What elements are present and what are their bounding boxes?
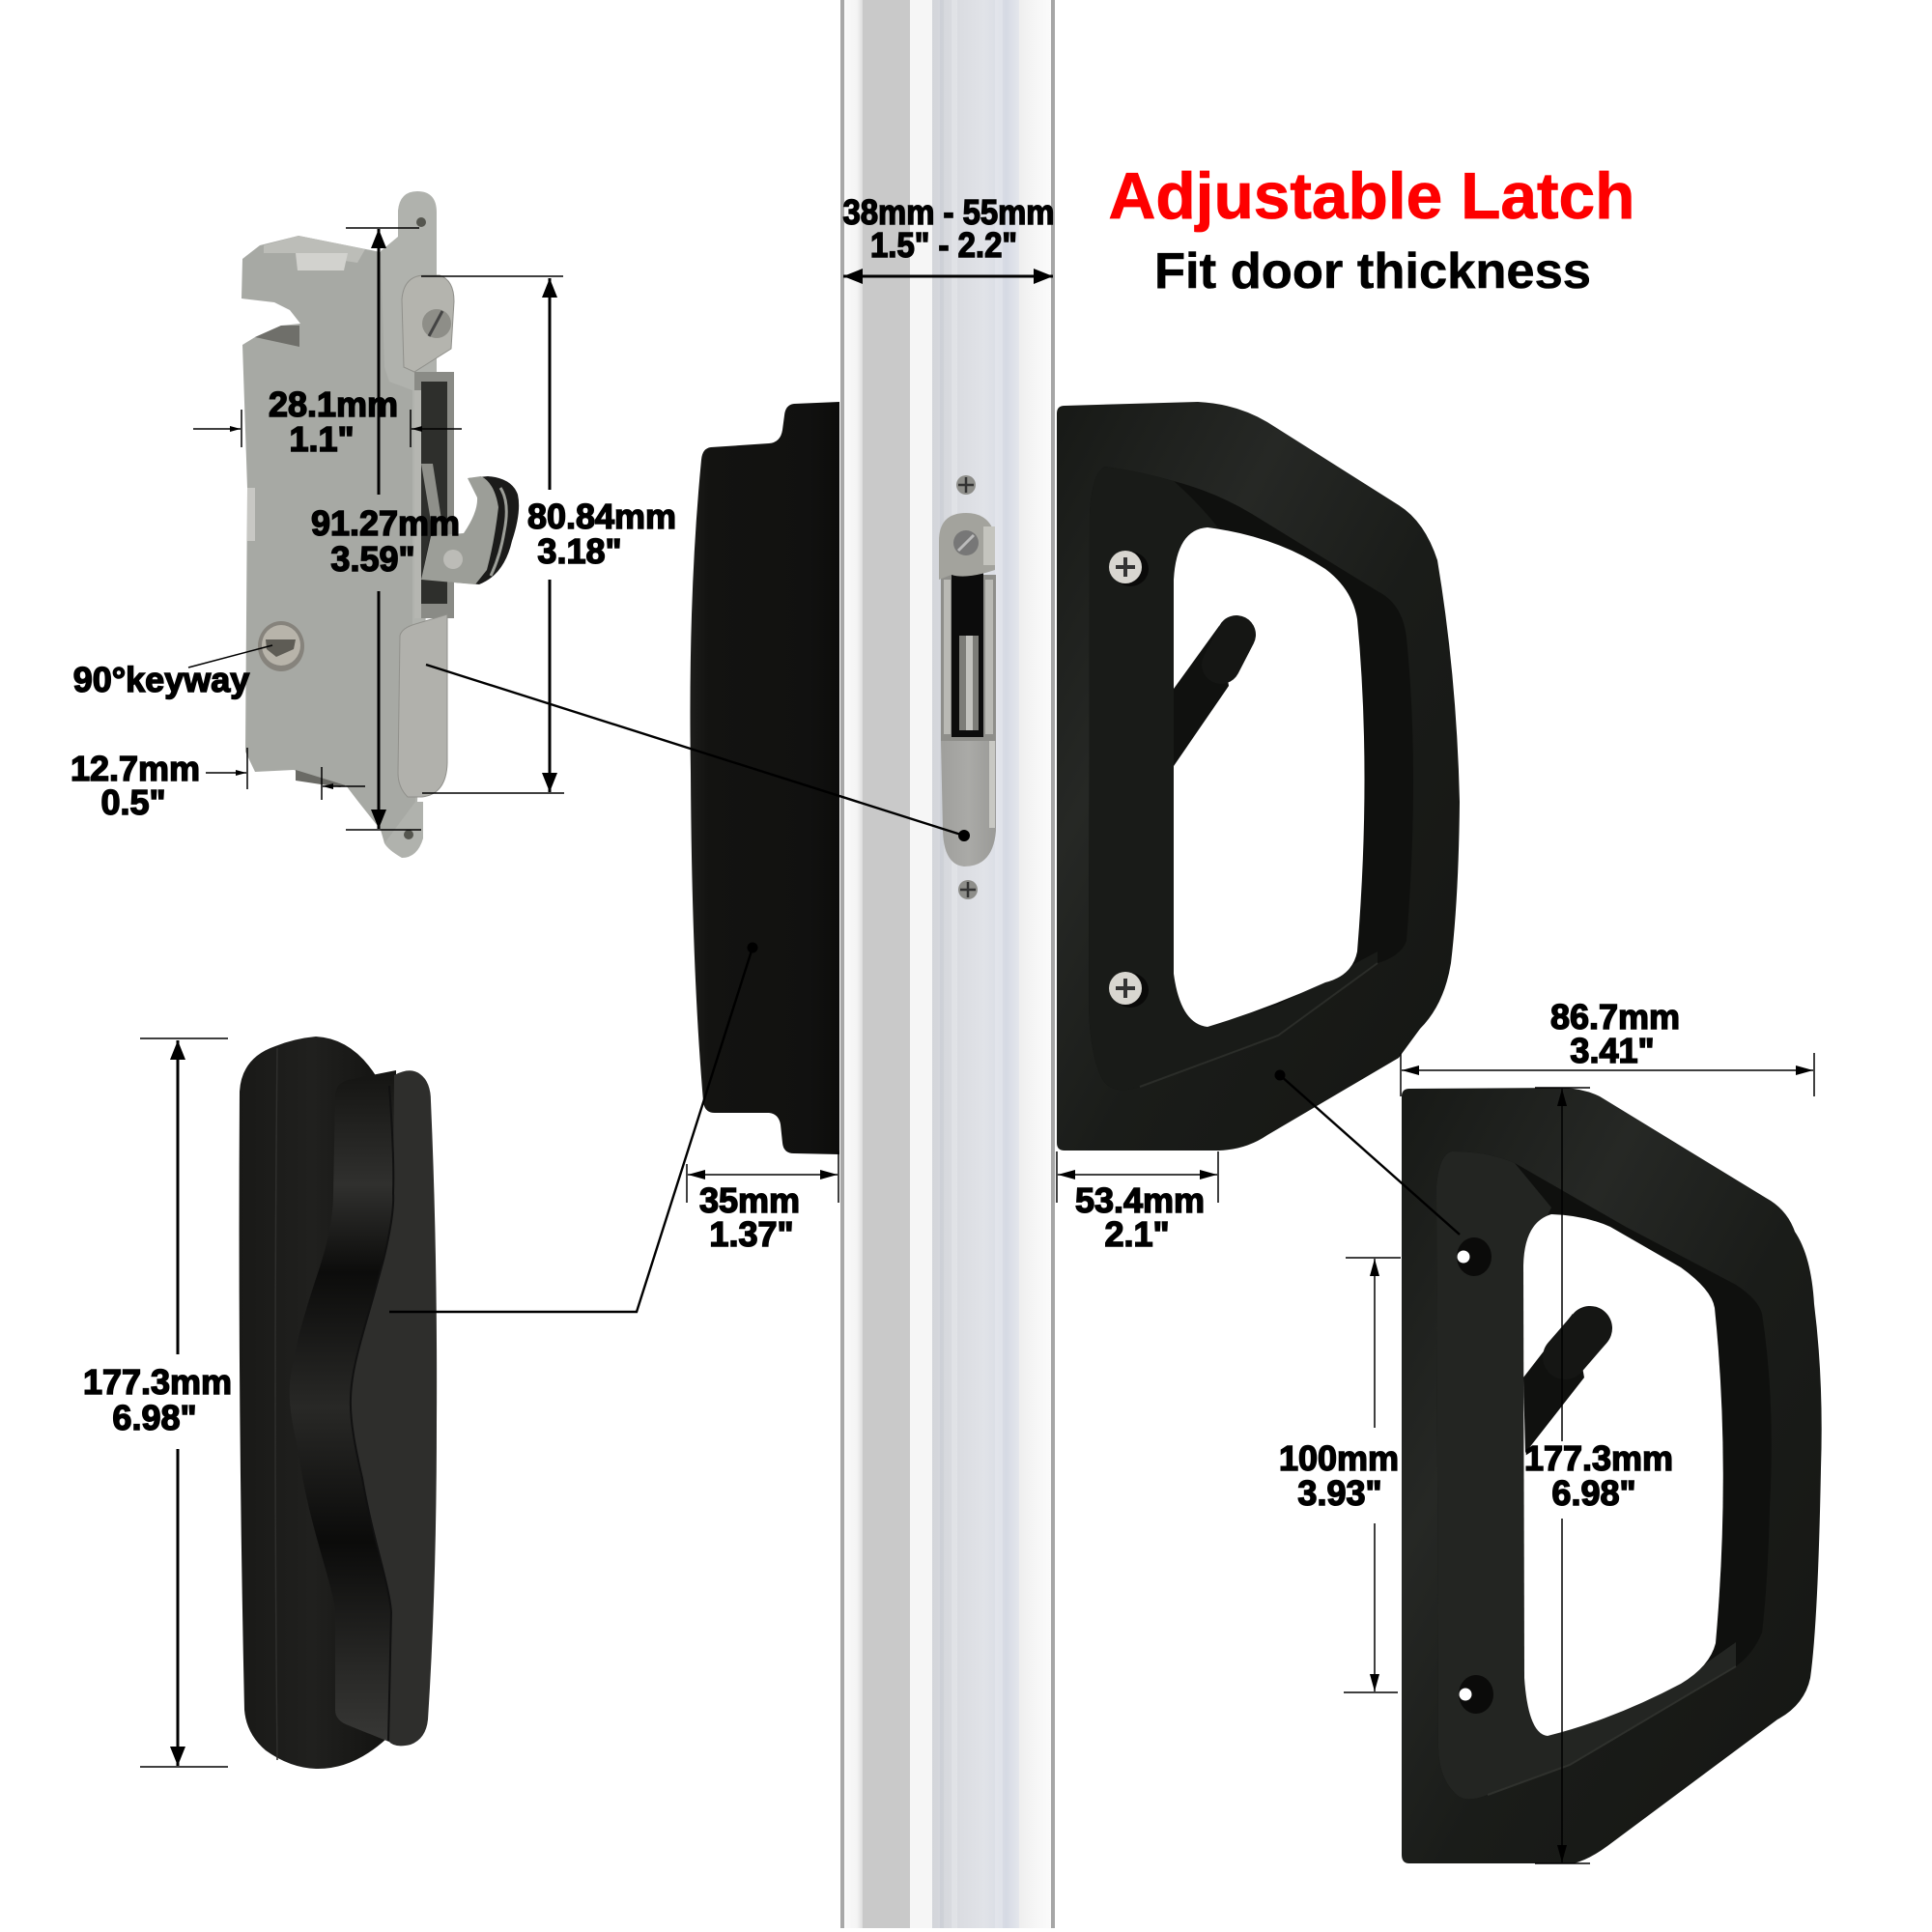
- body: [242, 236, 415, 843]
- dimension: screw spacing 100mm: 100mm: [1279, 1438, 1399, 1478]
- dimension: lock depth 28.1mm: 28.1mm: [269, 384, 398, 424]
- dimension: lock height 91.27mm: 91.27mm: [311, 503, 460, 543]
- dimension: outside handle width 86.7mm: 3.41": [1570, 1031, 1655, 1070]
- panel: door edge: [840, 0, 1055, 1928]
- dimension: inside handle height 177.3mm: [83, 1038, 232, 1767]
- dimension: door thickness: 1.5" - 2.2": [870, 225, 1017, 265]
- top plate: [402, 275, 454, 372]
- mounting strip: [381, 191, 437, 858]
- icon: mortise lock body: [242, 191, 519, 858]
- dimension: inside handle height 177.3mm: 6.98": [112, 1398, 197, 1437]
- dimension: keyway label: 90°keyway: [73, 660, 249, 699]
- dimension: door thickness: [842, 192, 1055, 276]
- dimension: inside handle depth 35mm: [687, 1151, 838, 1254]
- dimension: lock height 91.27mm: 3.59": [330, 539, 415, 579]
- dimension: screw spacing 100mm: 3.93": [1297, 1473, 1382, 1513]
- dimension: backset 12.7mm: 0.5": [100, 782, 166, 822]
- icon: inside pull back box: [690, 402, 839, 1154]
- lever: [1174, 626, 1236, 766]
- icon: inside handle front view: [240, 1037, 437, 1769]
- dimension: backset 12.7mm: [71, 748, 365, 822]
- bottom plate: [398, 614, 447, 797]
- dimension: outside handle depth 53.4mm: 53.4mm: [1075, 1180, 1205, 1220]
- dimension: lock depth 28.1mm: [193, 384, 462, 459]
- lever: [1523, 1314, 1590, 1453]
- dimension: latch plate 80.84mm: [421, 276, 676, 793]
- dimension: outside handle height 177.3mm: 6.98": [1551, 1473, 1636, 1513]
- icon: inside handle back view: [1402, 1088, 1822, 1863]
- title: Adjustable Latch: [1109, 159, 1634, 233]
- icon: outside handle side view: [1057, 402, 1460, 1151]
- dimension: inside handle depth 35mm: 1.37": [709, 1214, 794, 1254]
- dimension: outside handle height 177.3mm: 177.3mm: [1524, 1438, 1673, 1478]
- dimension: outside handle depth 53.4mm: 2.1": [1104, 1214, 1170, 1254]
- dimension: latch plate 80.84mm: 80.84mm: [527, 497, 676, 536]
- subtitle: Fit door thickness: [1154, 243, 1591, 299]
- dimension: lock depth 28.1mm: 1.1": [289, 419, 355, 459]
- latch hook: [421, 476, 519, 584]
- latch channel: [414, 372, 454, 618]
- dimension: screw spacing 100mm: [1279, 1258, 1401, 1692]
- dimension: backset 12.7mm: 12.7mm: [71, 749, 200, 788]
- dimension: outside handle height 177.3mm: [1524, 1088, 1673, 1863]
- icon: mortise latch in door edge: [939, 475, 996, 899]
- dimension: inside handle height 177.3mm: 177.3mm: [83, 1362, 232, 1402]
- dimension: door thickness: 38mm - 55mm: [842, 192, 1055, 232]
- dimension: inside handle depth 35mm: 35mm: [699, 1180, 800, 1220]
- dimension: lock height 91.27mm: [311, 228, 460, 830]
- dimension: outside handle width 86.7mm: [1401, 997, 1814, 1096]
- keyway: [258, 621, 304, 671]
- dimension: latch plate 80.84mm: 3.18": [537, 531, 622, 571]
- dimension: outside handle depth 53.4mm: [1057, 1151, 1218, 1254]
- callout: connector lines: [188, 645, 1460, 1312]
- dimension: outside handle width 86.7mm: 86.7mm: [1550, 997, 1680, 1037]
